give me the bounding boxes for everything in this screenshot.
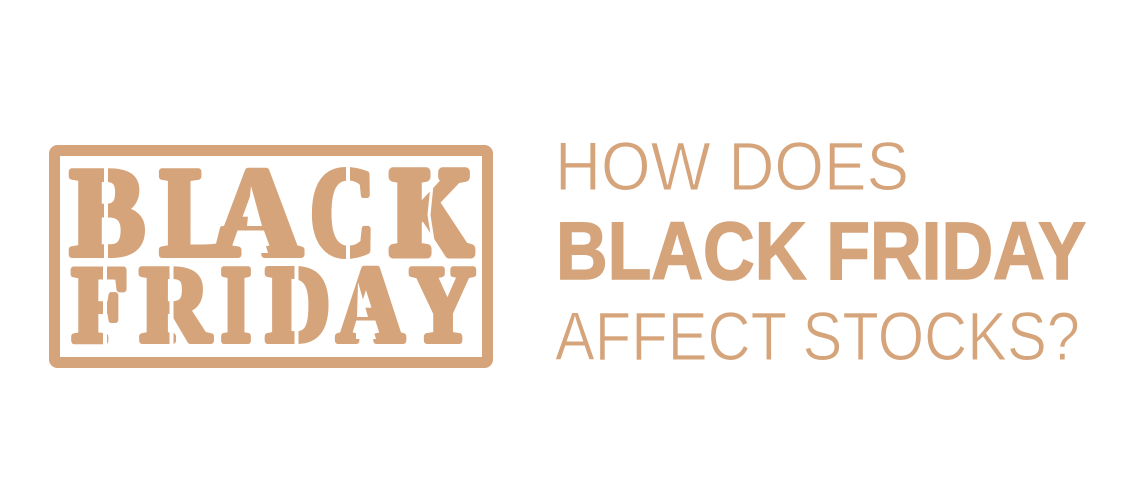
stamp word: BLACK: C bbox=[310, 144, 375, 282]
stencil cuts bbox=[105, 165, 436, 348]
stamp word: BLACK: K bbox=[391, 144, 472, 280]
stamp word: FRIDAY: I bbox=[221, 246, 251, 364]
stamp frame bbox=[54, 150, 488, 362]
stamp word: FRIDAY: D bbox=[266, 246, 330, 364]
stamp word: BLACK bbox=[70, 144, 472, 282]
heading line: HOW DOES: HOW DOES bbox=[555, 128, 909, 205]
stamp word: FRIDAY bbox=[72, 246, 475, 364]
stamp word: FRIDAY: Y bbox=[410, 246, 475, 364]
stamp word: FRIDAY: A bbox=[337, 246, 404, 364]
stamp: Black Friday bbox=[54, 144, 488, 364]
stamp word: FRIDAY: R bbox=[140, 246, 211, 364]
stamp word: BLACK: B bbox=[70, 144, 145, 282]
stamp word: FRIDAY: F bbox=[72, 246, 128, 364]
heading bbox=[555, 128, 1086, 375]
stamp word: BLACK: L bbox=[160, 144, 232, 282]
stamp word: BLACK: A bbox=[212, 144, 302, 282]
